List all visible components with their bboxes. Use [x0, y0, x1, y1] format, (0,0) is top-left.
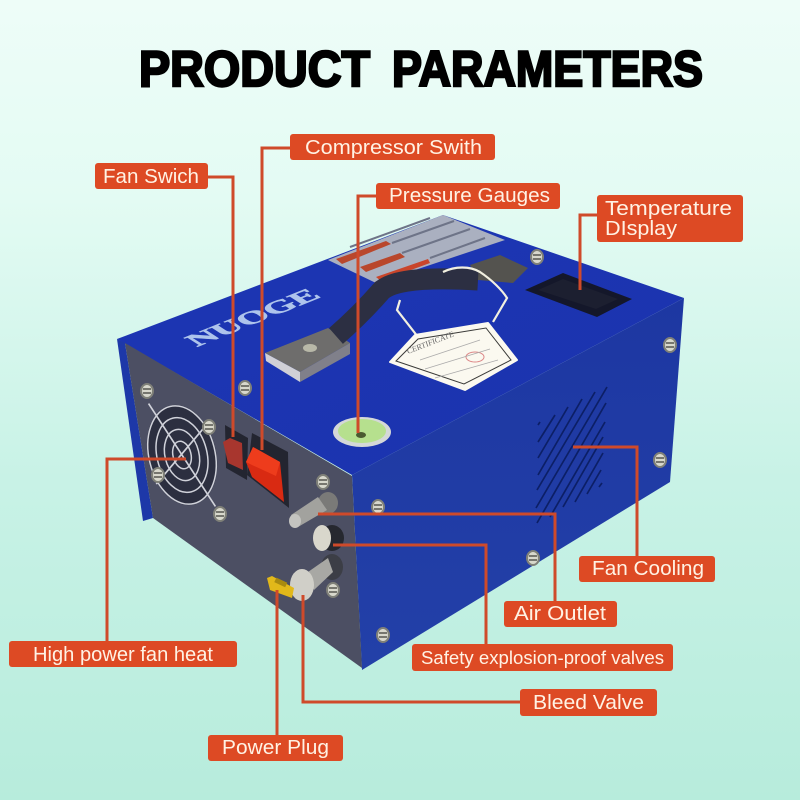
product: air compressor box — [117, 215, 684, 670]
fan guard — [135, 390, 229, 520]
callout: safety valves: Safety explosion-proof valves — [421, 648, 664, 668]
certificate tag: CERTIFICATE — [406, 329, 455, 356]
callout: temperature display: DIsplay — [605, 218, 677, 240]
callout: air outlet — [318, 514, 617, 627]
air outlet fitting — [289, 474, 338, 528]
callout: fan cooling — [573, 447, 715, 582]
callout: compressor switch — [262, 134, 495, 450]
warning label — [328, 215, 505, 283]
callout: compressor switch: Compressor Swith — [305, 137, 482, 159]
rear flange — [117, 339, 153, 521]
callout: high power fan heat: High power fan heat — [33, 644, 213, 666]
callout: fan switch: Fan Swich — [103, 166, 199, 188]
pressure gauge — [333, 417, 391, 447]
title: PARAMETERS — [392, 41, 703, 97]
certificate tag — [390, 323, 517, 390]
power plug — [267, 576, 294, 598]
callout: fan cooling: Fan Cooling — [592, 558, 704, 580]
brand logo: NUOGE — [179, 285, 327, 350]
handle — [265, 255, 528, 382]
side screws — [238, 249, 677, 643]
top face — [117, 215, 684, 475]
display window — [525, 273, 632, 317]
callout: power plug: Power Plug — [222, 737, 329, 759]
callout: safety valves — [333, 545, 673, 671]
vent slots — [536, 387, 607, 523]
control panel — [125, 343, 362, 668]
callout: air outlet: Air Outlet — [514, 603, 606, 625]
callout: bleed valve — [303, 595, 657, 716]
callout: pressure gauges: Pressure Gauges — [389, 185, 550, 207]
tag string — [397, 268, 507, 337]
callout: temperature display: Temperature — [605, 198, 732, 220]
compressor switch — [246, 433, 289, 508]
callout: fan switch — [95, 163, 233, 437]
title — [139, 41, 703, 97]
callout: high power fan heat — [9, 459, 237, 667]
callout: bleed valve: Bleed Valve — [533, 692, 644, 714]
fan switch — [223, 425, 248, 480]
right side face with vents — [352, 298, 684, 670]
callout: pressure gauges — [358, 183, 560, 433]
safety valve — [313, 525, 344, 551]
bleed valve knob — [290, 554, 343, 601]
callout: power plug — [208, 590, 343, 761]
fan screws — [140, 383, 227, 522]
callout: temperature display — [580, 195, 743, 290]
title: PRODUCT — [139, 41, 370, 97]
